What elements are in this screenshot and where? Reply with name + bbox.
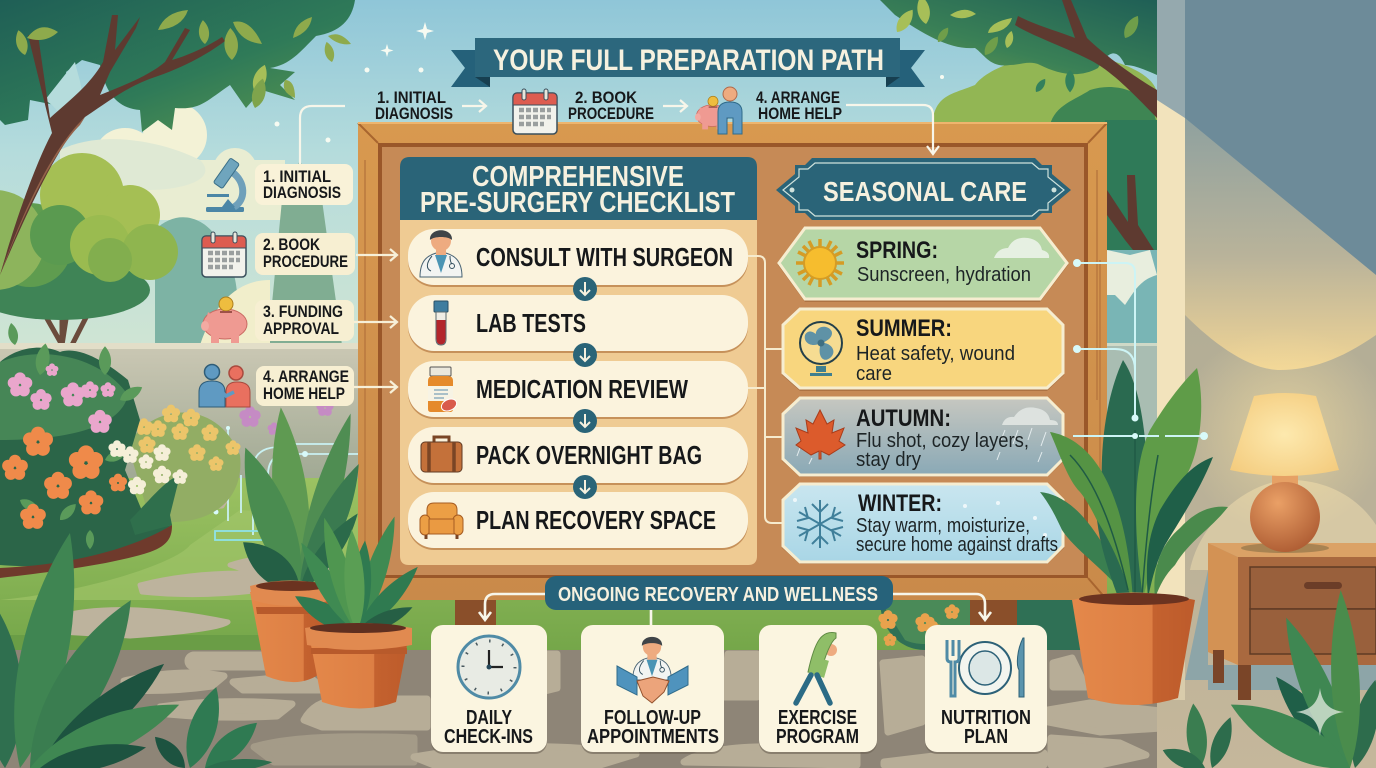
icon: clock [458, 636, 520, 698]
left step: arrange home help [199, 364, 354, 407]
heading: seasonal care: SEASONAL CARE [823, 176, 1027, 207]
glow lines left [214, 426, 397, 540]
board posts [455, 598, 1017, 626]
card: daily check-ins: DAILY [466, 707, 513, 729]
arrows: left steps to checklist [354, 249, 397, 393]
card: exercise program [759, 625, 877, 754]
top step 4 text: 4. ARRANGE [756, 88, 840, 107]
potted plant: right [1040, 360, 1228, 705]
left step: arrange home help: 4. ARRANGE [263, 367, 349, 386]
left step: funding approval: 3. FUNDING [263, 302, 343, 321]
garden wall [0, 344, 360, 484]
room wall and window frame [1157, 0, 1376, 768]
step: plan recovery space: PLAN RECOVERY SPACE [476, 505, 716, 535]
foliage: bottom right corner [1160, 589, 1376, 768]
left step: arrange home help: HOME HELP [263, 384, 345, 403]
top step 1 text: DIAGNOSIS [375, 104, 453, 123]
checklist heading [400, 157, 757, 220]
card: autumn: stay dry [856, 449, 921, 471]
flow connector: top left [300, 106, 345, 165]
card: spring: Sunscreen, hydration [857, 264, 1031, 286]
card: autumn: AUTUMN: [856, 405, 951, 432]
patio [0, 650, 1376, 768]
arrow: top 2 to 3 [663, 100, 687, 112]
connectors: checklist to seasons [748, 256, 784, 523]
step: plan recovery space [408, 492, 748, 550]
arrow: top 1 to 2 [462, 100, 486, 112]
card: follow-up appointments: FOLLOW-UP [604, 707, 701, 729]
outdoor strip behind window side [1107, 250, 1157, 485]
sparkles [274, 22, 944, 142]
heading: seasonal care [776, 158, 1071, 220]
card: summer: Heat safety, wound [856, 343, 1015, 365]
card: daily check-ins: CHECK-INS [444, 726, 533, 748]
card: autumn [782, 398, 1064, 477]
banner: ongoing recovery and wellness: ONGOING RECOVERY AND WELLNESS [558, 584, 878, 606]
step: medication review [408, 361, 748, 419]
lawn [0, 478, 1160, 653]
top step 4 text [756, 88, 842, 123]
step: medication review: MEDICATION REVIEW [476, 374, 688, 404]
card: follow-up appointments: APPOINTMENTS [587, 726, 719, 748]
card: winter: Stay warm, moisturize, [856, 515, 1030, 537]
clouds [60, 103, 285, 220]
left step: microscope: 1. INITIAL [263, 167, 331, 186]
left step: microscope [206, 158, 353, 212]
left step: book procedure [202, 232, 355, 277]
sparkle mark [1296, 688, 1344, 736]
card: summer: SUMMER: [856, 315, 952, 342]
card: spring [778, 228, 1068, 302]
icon: piggy bank and person [695, 87, 742, 134]
card: follow-up appointments [581, 625, 724, 754]
card: exercise program: PROGRAM [776, 726, 859, 748]
potted plant: left front [290, 513, 424, 708]
top step 1 text: 1. INITIAL [377, 88, 446, 107]
foliage: bottom left corner [0, 528, 273, 768]
main wooden board [358, 123, 1107, 600]
step: pack overnight bag [408, 427, 748, 485]
icon: fan [800, 322, 842, 376]
step: consult with surgeon [408, 229, 748, 287]
card: autumn: Flu shot, cozy layers, [856, 430, 1029, 452]
left step: funding approval [201, 297, 354, 343]
card: nutrition plan: PLAN [964, 726, 1008, 748]
potted plant: left back [228, 406, 371, 682]
top step 2 text: PROCEDURE [568, 104, 654, 123]
left step: funding approval: APPROVAL [263, 319, 339, 338]
icon: doctor handshake [617, 637, 688, 703]
icon: plate and cutlery [947, 638, 1024, 697]
card: nutrition plan [925, 625, 1047, 754]
icon: microscope [206, 158, 244, 212]
step: lab tests [408, 295, 748, 353]
icon: sun [796, 239, 844, 287]
icon: helpers [199, 364, 250, 407]
teal background hills [155, 217, 238, 345]
card: winter: secure home against drafts [856, 534, 1058, 556]
top step 2 text [568, 88, 654, 123]
step: consult with surgeon: CONSULT WITH SURGEON [476, 242, 733, 272]
bush and flowers behind board [878, 600, 1110, 650]
left step: book procedure: 2. BOOK [263, 235, 321, 254]
checklist heading: PRE-SURGERY CHECKLIST [420, 187, 735, 219]
card: winter [782, 484, 1064, 564]
table lamp and nightstand [1208, 393, 1376, 700]
left step: book procedure: PROCEDURE [263, 252, 348, 271]
checklist heading: COMPREHENSIVE [472, 161, 684, 193]
card: summer [782, 309, 1064, 391]
panel: pre-surgery checklist [400, 157, 757, 565]
top step 4 text: HOME HELP [758, 104, 842, 123]
title banner: YOUR FULL PREPARATION PATH [493, 44, 884, 77]
top step 2 text: 2. BOOK [575, 88, 638, 107]
flower bushes left [0, 322, 334, 578]
icon: top calendar [513, 89, 557, 134]
title banner [451, 38, 925, 87]
icon: person stretching [796, 632, 837, 703]
glowing connectors right [1073, 259, 1208, 440]
arrows between checklist steps [573, 277, 597, 499]
step: pack overnight bag: PACK OVERNIGHT BAG [476, 440, 702, 470]
icon: maple leaf [796, 410, 845, 459]
left step: microscope: DIAGNOSIS [263, 183, 341, 202]
card: nutrition plan: NUTRITION [941, 707, 1031, 729]
banner: ongoing recovery and wellness [479, 576, 991, 625]
tree: upper left [0, 0, 355, 275]
card: exercise program: EXERCISE [778, 707, 857, 729]
card: winter: WINTER: [858, 490, 942, 517]
step: lab tests: LAB TESTS [476, 308, 586, 338]
card: spring: SPRING: [856, 237, 938, 264]
card: summer: care [856, 363, 892, 385]
tree: upper right [880, 0, 1157, 280]
stepping stones on lawn [57, 498, 333, 636]
arrow: top path to seasonal care [846, 105, 939, 154]
card: daily check-ins [431, 625, 547, 754]
top step 1 text [375, 88, 453, 123]
round tree left [0, 153, 178, 345]
icon: snowflake [797, 500, 843, 548]
